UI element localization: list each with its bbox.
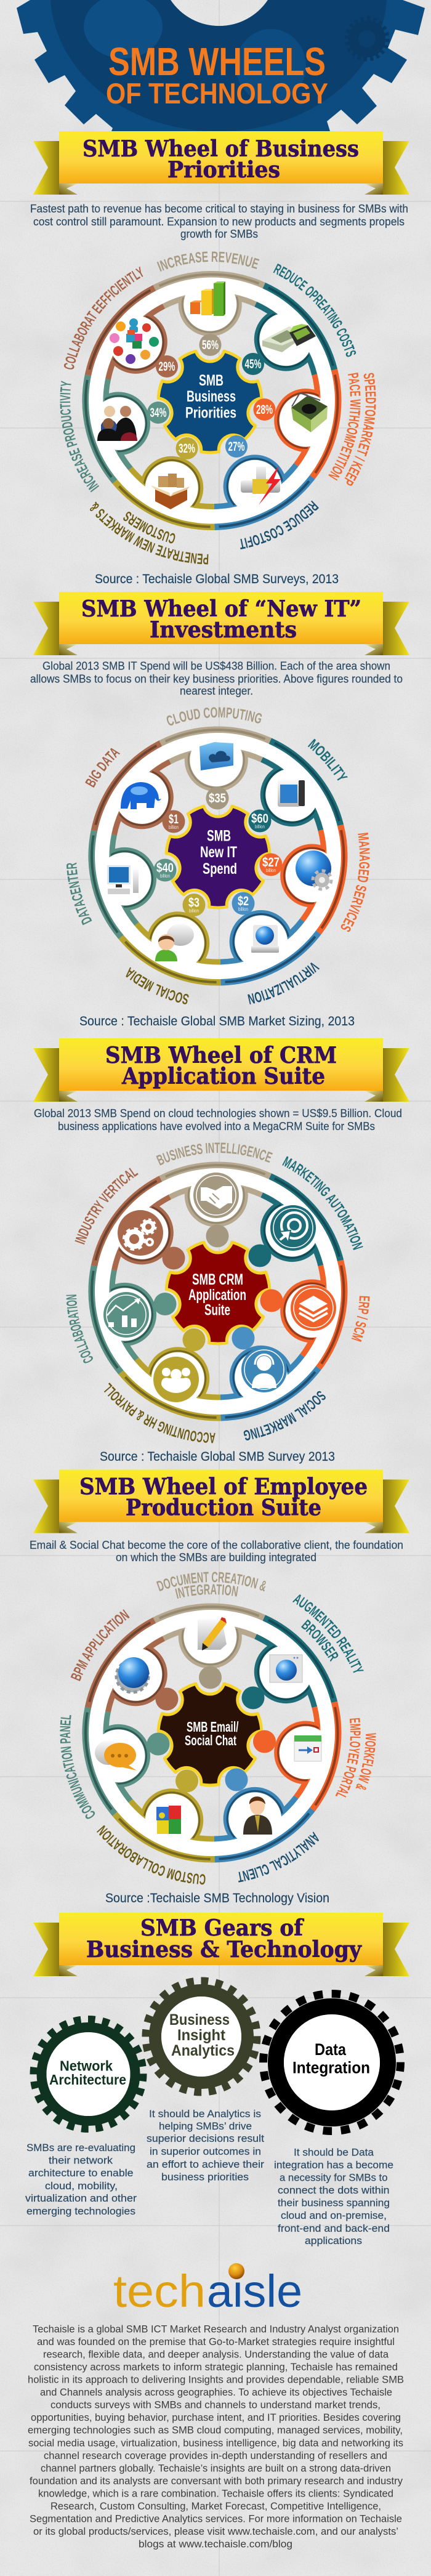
wheel 2: new IT spend — [60, 703, 379, 1012]
header gear — [17, 0, 425, 131]
wheel 4 arc labels: BROWSER — [301, 1620, 339, 1661]
icon: browser globe — [270, 1655, 302, 1682]
source 3: Source : Techaisle Global SMB Survey 2013 — [100, 1450, 335, 1464]
wheel 4 arc labels: CUSTOM COLLABORATION — [97, 1825, 206, 1884]
text: business insight analytics: an effort to achieve their — [147, 2158, 264, 2170]
wheel 2 arc labels: MOBILITY — [308, 739, 348, 781]
gear: business insight analytics: Business — [169, 2011, 230, 2029]
about text: or its global products/services, please visit www.techaisle.com, and our analysts’ — [33, 2526, 398, 2537]
text: network architecture: emerging technologies — [26, 2205, 135, 2217]
wheel 3: CRM suite — [59, 1138, 376, 1458]
wheel 3 connector dots — [154, 1224, 283, 1351]
icon: globe hard drive — [251, 925, 279, 953]
text: data integration: It should be Data — [294, 2147, 374, 2158]
intro text: CRM: business applications have evolved into a MegaCRM Suite for SMBs — [58, 1120, 375, 1133]
about text: Techaisle is a global SMB ICT Market Research and Industry Analyst organization — [33, 2324, 399, 2335]
wheel 1 percentages: 34% — [150, 406, 167, 420]
icon: person with speech bubble — [155, 924, 194, 961]
wheel 2 dollar values: billion — [266, 868, 276, 873]
icon: group disc — [153, 1357, 199, 1402]
text: network architecture: their network — [49, 2154, 113, 2166]
about text: research, flexible data, and deeper analysis. Understanding the value of data — [43, 2349, 389, 2360]
wheel 2 dollar values: billion — [169, 825, 179, 830]
gear: network architecture: Network — [60, 2058, 113, 2074]
wheel 1 percentages: 32% — [179, 442, 195, 456]
wheel 1 percentages: 29% — [159, 360, 175, 374]
gear: network architecture: Architecture — [49, 2072, 126, 2088]
wheel 2 center label — [200, 828, 237, 878]
wheel 3 center label — [188, 1271, 246, 1319]
banner: new IT investments — [33, 592, 409, 655]
wheel 1: business priorities — [47, 248, 387, 580]
wheel 4 arc labels: COMMUNICATION PANEL — [48, 1710, 100, 1825]
wheel 1 center label: Business — [187, 388, 236, 405]
wheel 2 dollar values: $27 — [262, 855, 280, 870]
wheel 2 dollar values: billion — [160, 873, 170, 879]
about text: blogs at www.techaisle.com/blog — [139, 2539, 292, 2550]
intro text: CRM — [34, 1107, 402, 1133]
wheel 4: employee production — [48, 1569, 381, 1899]
banner: CRM application suite: Application Suite — [121, 1064, 325, 1089]
wheel 2 dollar values — [154, 787, 282, 916]
wheel 1 arc labels: INCREASE REVENUE — [156, 251, 260, 272]
about text: channel partners globally. Techaisle’s insights are built on a strong data-driven — [41, 2463, 391, 2474]
text: network architecture: SMBs are re-evaluating — [26, 2142, 135, 2154]
wheel 1 percentages: 56% — [202, 338, 219, 352]
wheel 4 arc labels: ANALYTICAL CLIENT — [238, 1831, 319, 1883]
icon: headset agent disc — [241, 1347, 287, 1392]
icon: cloud folder — [199, 742, 233, 770]
title: SMB WHEELS — [108, 39, 326, 84]
banner: gears of business and technology — [33, 1913, 409, 1976]
text: data integration: a necessity for SMBs to — [280, 2172, 388, 2184]
wheel 3 arc labels: SOCIAL MARKETING — [244, 1391, 326, 1440]
wheel 3 arc labels: BUSINESS INTELLIGENCE — [156, 1143, 273, 1165]
icon: calendar — [294, 1735, 321, 1761]
text: business insight analytics: It should be Analytics is — [149, 2108, 261, 2120]
wheel 4 arc labels: BPM APPLICATION — [63, 1603, 135, 1687]
banner: gears of business and technology: Business & Technology — [86, 1937, 362, 1963]
wheel 1 percentages: 45% — [245, 357, 262, 371]
wheel 2 center label: SMB — [207, 828, 231, 845]
about text: and Channels analysis across geographies. To achieve its objectives Techaisle — [40, 2387, 392, 2398]
wheel 3 arc labels: MARKETING AUTOMATION — [282, 1156, 363, 1250]
banner: employee production suite: SMB Wheel of Employee — [79, 1474, 368, 1500]
intro text: business priorities: Fastest path to revenue has become critical to staying in business for SMBs with — [30, 203, 408, 215]
icon: puzzle team — [110, 318, 159, 364]
banner: business priorities: SMB Wheel of Business — [83, 136, 359, 162]
icon: document and pencil — [198, 1617, 227, 1650]
banner: gears of business and technology: SMB Gears of — [140, 1915, 304, 1941]
logo: techaisle: tech — [113, 2266, 206, 2317]
about text: channel research coverage provides in-depth understanding of resellers and — [44, 2450, 387, 2461]
text: network architecture — [25, 2142, 137, 2217]
wheel 3 center label: Application — [188, 1286, 246, 1304]
wheel 2 arc labels: VIRTUALIZATION — [248, 963, 320, 1004]
wheel 2 arc labels: DATACENTER — [66, 862, 92, 925]
wheel 1 arc labels: REDUCE COSTOFIT — [240, 500, 319, 549]
wheel 2 arc labels: SOCIAL MEDIA — [126, 967, 188, 1004]
icon: blue elephant — [121, 782, 161, 809]
about text: knowledge, which is a rare combination. Techaisle offers its clients: Syndicated — [38, 2488, 393, 2499]
text: data integration: applications — [305, 2235, 362, 2247]
text: business insight analytics: business priorities — [161, 2171, 249, 2183]
about text: consistency across markets to inform strategic planning, Techaisle has remained — [34, 2362, 398, 2373]
wheel 4 arc labels — [48, 1569, 381, 1899]
wheel 2 center gear — [166, 806, 270, 908]
about text: Research, Custom Consulting, Market Forecast, Competitive Intelligence, — [50, 2501, 381, 2512]
source 2: Source : Techaisle Global SMB Market Sizing, 2013 — [79, 1014, 355, 1028]
wheel 4 rings and lobes — [83, 1604, 340, 1862]
wheel 2 rings and lobes — [89, 727, 347, 985]
icon: handshake disc — [193, 1173, 239, 1218]
wheel 1 arc labels: SPEEDTOMARKET / KEEP — [345, 373, 376, 486]
wheel 2 dollar values: $60 — [251, 812, 268, 826]
about text: conducts surveys with SMBs and channels to understand market trends, — [50, 2400, 381, 2411]
title — [106, 39, 328, 110]
icon: man in suit — [243, 1796, 272, 1835]
wheel 4 arc labels: INTEGRATION — [175, 1584, 238, 1599]
wheel 2 arc labels: BIG DATA — [85, 748, 121, 788]
wheel 2 dollar values: $40 — [156, 861, 174, 875]
intro text: employee suite: Email & Social Chat become the core of the collaborative client, the foundation — [30, 1539, 403, 1551]
wheel 2 dollar values: $35 — [209, 791, 226, 806]
wheel 4 arc labels: WORKFLOW & — [356, 1733, 376, 1790]
about text: foundation and its analysts are conversant with both primary research and industry — [30, 2476, 403, 2487]
gear: data integration: Data — [315, 2040, 347, 2059]
wheel 1 center gear — [158, 351, 262, 453]
wheel 1 center label — [185, 372, 236, 421]
wheel 1 percentages: 27% — [228, 440, 245, 454]
gear: network architecture — [33, 2019, 143, 2129]
icon: puzzle cube — [156, 1806, 181, 1834]
wheel 2 center label: New IT — [200, 844, 237, 861]
text: data integration: cloud and on-premise, — [281, 2210, 387, 2221]
banner: new IT investments: SMB Wheel of “New IT” — [81, 596, 361, 622]
gear: business insight analytics: Insight — [177, 2027, 226, 2044]
icon: chat bubbles — [95, 1740, 137, 1770]
wheel 3 arc labels: INDUSTRY VERTICAL — [75, 1168, 139, 1245]
wheel 3 arc labels: ERP / SCM — [351, 1296, 369, 1343]
wheel 2 dollar values: $2 — [238, 894, 249, 908]
intro text: new IT: allows SMBs to focus on their key business priorities. Above figures rounded to — [30, 672, 403, 685]
wheel 1 arc labels: COLLABORAT EEFFICIENTLY — [64, 266, 143, 369]
text: data integration: connect the dots within — [278, 2184, 390, 2196]
text: data integration: front-end and back-end — [278, 2223, 390, 2234]
text: business insight analytics: superior decisions result — [147, 2133, 264, 2144]
wheel 2 dollar values: $1 — [169, 812, 179, 826]
text: network architecture: cloud, mobility, — [45, 2180, 118, 2192]
text: business insight analytics: in superior outcomes in — [150, 2146, 261, 2157]
wheel 1 center label: SMB — [199, 372, 224, 389]
gear: business insight analytics: Analytics — [171, 2042, 235, 2059]
wheel 1 arc labels: PENETRATE NEW MARKETS & — [90, 501, 208, 564]
banner: CRM application suite: SMB Wheel of CRM — [105, 1043, 337, 1068]
wheel 1 percentages — [147, 334, 276, 459]
text: network architecture: architecture to enable — [28, 2167, 133, 2179]
wheel 1 arc labels: INCREASE PRODUCTIVITY — [60, 381, 99, 493]
text: data integration — [274, 2147, 393, 2247]
icon: cardboard boxes — [151, 474, 190, 509]
icon: green crate — [291, 393, 328, 432]
icon: pipe with lightning — [241, 466, 281, 505]
gear: business insight analytics — [145, 1980, 257, 2093]
wheel 3 rings and lobes — [89, 1163, 347, 1420]
intro text: CRM: Global 2013 SMB Spend on cloud technologies shown = US$9.5 Billion. Cloud — [34, 1107, 402, 1120]
wheel 3 center label: SMB CRM — [192, 1271, 243, 1288]
wheel 4 connector dots — [147, 1666, 276, 1792]
wheel 4 center gear — [158, 1684, 262, 1785]
wheel 1 center label: Priorities — [185, 404, 236, 421]
text: data integration: their business spanning — [278, 2197, 390, 2209]
wheel 2 dollar values: $3 — [188, 895, 199, 910]
source 1: Source : Techaisle Global SMB Surveys, 2013 — [95, 572, 339, 586]
wheel 3 arc labels: COLLABORATION — [66, 1294, 93, 1363]
wheel 2 dollar values: billion — [255, 824, 265, 830]
icon: gears disc — [118, 1210, 163, 1256]
wheel 4 arc labels: DOCUMENT CREATION & — [156, 1572, 266, 1591]
banner: CRM application suite — [33, 1038, 409, 1102]
banner: employee production suite — [33, 1469, 409, 1533]
wheel 4 center label: SMB Email/ — [187, 1719, 239, 1735]
icon: money and phone — [262, 324, 316, 352]
intro text: employee suite: on which the SMBs are building integrated — [116, 1551, 316, 1564]
wheel 1 percentages: 28% — [256, 403, 273, 417]
icon: business people — [97, 406, 137, 441]
intro text: business priorities: cost control still paramount. Expansion to new products and segments propels — [33, 216, 405, 228]
wheel 3 arc labels: ACCOUNTING HR & PAYROLL — [103, 1383, 216, 1443]
about text: Segmentation and Predictive Analytics services. For more information on Techaisle — [30, 2514, 402, 2525]
gear: data integration: Integration — [292, 2058, 370, 2077]
wheel 1 arc labels — [47, 248, 387, 580]
icon: globe with gear — [296, 850, 331, 889]
source 4: Source :Techaisle SMB Technology Vision — [105, 1891, 329, 1905]
banner: business priorities — [33, 131, 409, 195]
about text — [28, 2324, 404, 2550]
wheel 4 center label — [185, 1719, 239, 1748]
wheel 1 arc labels: PACE WITHCOMPETITION — [328, 373, 361, 480]
logo: techaisle — [113, 2263, 302, 2317]
banner: business priorities: Priorities — [167, 157, 280, 183]
intro text: new IT: Global 2013 SMB IT Spend will be US$438 Billion. Each of the area shown — [42, 660, 390, 672]
about text: and was founded on the premise that Go-to-Market strategies require insightful — [37, 2336, 395, 2348]
wheel 1 arc labels: CUSTOMERS — [123, 511, 175, 543]
wheel 2 center label: Spend — [203, 860, 237, 878]
wheel 3 center label: Suite — [204, 1302, 230, 1319]
icon: layers disc — [291, 1285, 336, 1331]
about text: emerging technologies such as SMB cloud computing, managed services, mobility, — [28, 2425, 403, 2436]
wheel 2 arc labels — [60, 703, 379, 1012]
about text: holistic in its approach to delivering Insights and provides dependable, reliable SMB — [28, 2375, 404, 2386]
gear: data integration — [264, 1994, 400, 2131]
about text: social media usage, virtualization, business intelligence, big data and networking its — [28, 2437, 403, 2449]
intro text: new IT — [30, 660, 403, 697]
about text: opportunities, buying behavior, purchase intent, and IT priorities. Besides covering — [31, 2412, 401, 2423]
icon: globe gear — [116, 1657, 149, 1692]
wheel 2 arc labels: CLOUD COMPUTING — [166, 707, 262, 725]
wheel 3 center gear — [166, 1242, 270, 1344]
banner: employee production suite: Production Suite — [126, 1495, 321, 1521]
text: network architecture: virtualization and other — [25, 2192, 137, 2204]
wheel 3 arc labels — [59, 1138, 376, 1458]
wheel 1 arc labels: REDUCE OPREATING COSTS — [273, 264, 356, 357]
text: data integration: integration has a become — [274, 2159, 393, 2171]
wheel 4 arc labels: EMPLOYEE PORTAL — [335, 1718, 361, 1798]
icon: desktop computer — [107, 865, 139, 894]
text: business insight analytics — [147, 2108, 264, 2183]
wheel 2 dollar values: billion — [238, 906, 248, 912]
intro text: business priorities: growth for SMBs — [180, 228, 258, 240]
wheel 4 center label: Social Chat — [185, 1732, 236, 1748]
banner: new IT investments: Investments — [150, 617, 297, 643]
icon: bar chart — [190, 281, 225, 316]
logo: techaisle: aisle — [207, 2266, 302, 2317]
icon: target disc — [270, 1205, 316, 1251]
intro text: employee suite — [30, 1539, 403, 1564]
title: OF TECHNOLOGY — [106, 77, 328, 110]
wheel 4 arc labels: AUGMENTED REALITY — [292, 1594, 364, 1673]
icon: mobile devices — [278, 780, 305, 807]
wheel 2 dollar values: billion — [189, 908, 199, 914]
text: business insight analytics: helping SMBs’ drive — [159, 2120, 252, 2132]
wheel 1 rings and lobes — [83, 272, 340, 529]
wheel 2 arc labels: MANAGED SERVICES — [341, 833, 370, 932]
intro text: business priorities — [30, 203, 408, 240]
icon: growth chart disc — [103, 1292, 149, 1338]
intro text: new IT: nearest integer. — [180, 685, 253, 697]
